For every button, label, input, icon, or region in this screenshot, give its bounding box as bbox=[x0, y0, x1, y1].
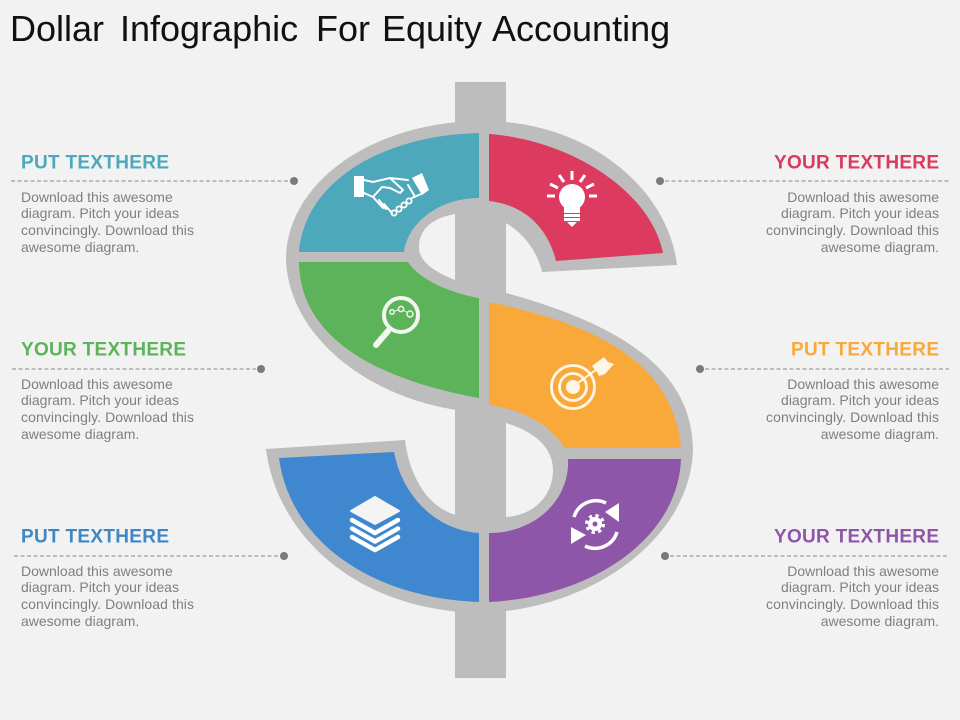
panel: red light bulb bbox=[489, 134, 663, 261]
callout: left top: diagram. Pitch your ideas bbox=[21, 205, 179, 221]
panel: purple cycle gear bbox=[489, 459, 681, 602]
icon: magnifier bbox=[376, 298, 418, 345]
callout: left top bbox=[11, 152, 298, 255]
panel: green magnifier bbox=[299, 262, 479, 398]
callout: left bottom: PUT TEXTHERE bbox=[21, 526, 169, 548]
icon: light bulb bbox=[547, 171, 597, 227]
callout: left bottom bbox=[14, 526, 288, 629]
callout: right top: diagram. Pitch your ideas bbox=[781, 205, 939, 221]
callout: left bottom: diagram. Pitch your ideas bbox=[21, 579, 179, 595]
icon: target and arrow bbox=[552, 357, 614, 408]
title: Equity bbox=[382, 8, 482, 49]
callout: right top bbox=[656, 152, 949, 255]
callout: right top: YOUR TEXTHERE bbox=[774, 152, 939, 174]
panel: orange target bbox=[489, 302, 681, 448]
callout: left middle: Download this awesome bbox=[21, 376, 173, 392]
callout: right middle: diagram. Pitch your ideas bbox=[781, 392, 939, 408]
callout: right middle: PUT TEXTHERE bbox=[791, 340, 939, 360]
callout: left middle: diagram. Pitch your ideas bbox=[21, 392, 179, 408]
callout: left middle bbox=[12, 340, 265, 442]
callout: left top: awesome diagram. bbox=[21, 239, 139, 255]
callout: right middle: Download this awesome bbox=[787, 376, 939, 392]
callout: left bottom: Download this awesome bbox=[21, 563, 173, 579]
callout: right bottom bbox=[661, 526, 949, 629]
callout: left bottom: awesome diagram. bbox=[21, 613, 139, 629]
callout: left bottom: convincingly. Download this bbox=[21, 596, 194, 612]
callout: right middle: convincingly. Download this bbox=[766, 409, 939, 425]
callout: left middle: YOUR TEXTHERE bbox=[21, 340, 186, 360]
icon: handshake bbox=[354, 173, 429, 216]
callout: right top: convincingly. Download this bbox=[766, 222, 939, 238]
callout: right top: awesome diagram. bbox=[821, 239, 939, 255]
icon: layers bbox=[351, 497, 399, 550]
title: Accounting bbox=[492, 8, 670, 49]
callout: left middle: convincingly. Download this bbox=[21, 409, 194, 425]
dollar sign backdrop bbox=[266, 82, 693, 678]
title: Dollar bbox=[10, 8, 104, 49]
callout: right bottom: Download this awesome bbox=[787, 563, 939, 579]
callout: right bottom: YOUR TEXTHERE bbox=[774, 526, 939, 548]
callout: right top: Download this awesome bbox=[787, 189, 939, 205]
callout: left middle: awesome diagram. bbox=[21, 426, 139, 442]
callout: right bottom: awesome diagram. bbox=[821, 613, 939, 629]
callout: right bottom: diagram. Pitch your ideas bbox=[781, 579, 939, 595]
callout: right middle: awesome diagram. bbox=[821, 426, 939, 442]
icon: cycle gear bbox=[571, 501, 619, 548]
title: Infographic bbox=[120, 8, 298, 49]
panel: blue layers bbox=[279, 452, 479, 602]
panel: teal handshake bbox=[299, 133, 479, 252]
callout: left top: convincingly. Download this bbox=[21, 222, 194, 238]
title: For bbox=[316, 8, 370, 49]
callout: left top: Download this awesome bbox=[21, 189, 173, 205]
callout: left top: PUT TEXTHERE bbox=[21, 152, 169, 174]
callout: right bottom: convincingly. Download this bbox=[766, 596, 939, 612]
callout: right middle bbox=[696, 340, 949, 442]
